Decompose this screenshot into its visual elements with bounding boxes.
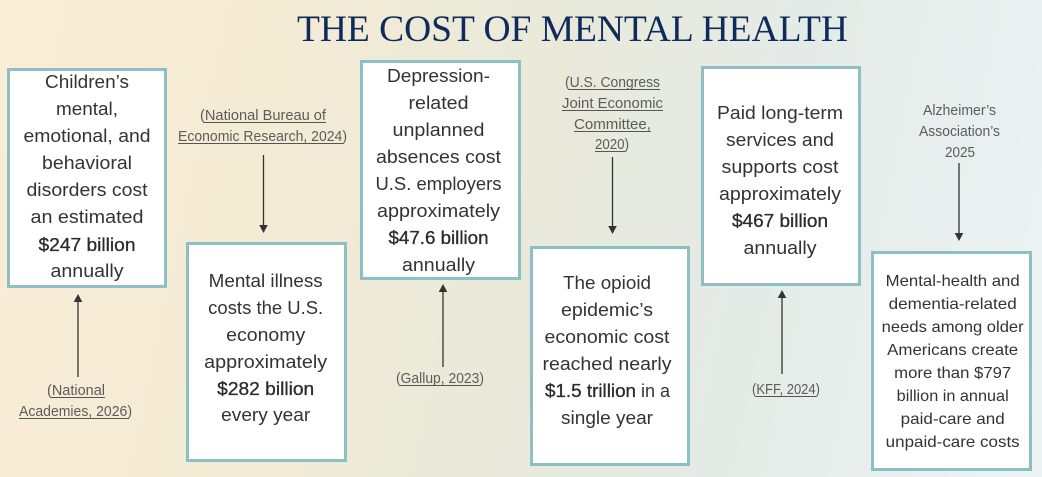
panel: opioid epidemic cost: epidemic’s	[561, 300, 653, 320]
citation: U.S. Congress Joint Economic Committee, 2020: (U.S. Congress	[565, 75, 660, 91]
panel: children's disorders cost: $247 billion	[38, 235, 136, 255]
panel: mental illness cost: Mental illness	[209, 271, 323, 291]
citation: National Academies, 2026: (National	[47, 383, 105, 399]
citation: Alzheimer's Association 2025: Association’s	[919, 124, 1000, 140]
citation: Gallup, 2023: (Gallup, 2023)	[396, 371, 484, 387]
citation: Alzheimer's Association 2025: Alzheimer’s	[923, 103, 996, 119]
panel: depression-related absences cost: related	[408, 93, 468, 113]
citation: U.S. Congress Joint Economic Committee, 2020: Joint Economic	[562, 96, 663, 112]
panel: older Americans care cost: dementia-related	[889, 296, 1017, 313]
panel: children's disorders cost: disorders cost	[26, 180, 148, 200]
panel: long-term services cost: annually	[744, 238, 816, 258]
citation: Alzheimer's Association 2025	[919, 103, 1000, 161]
citation: U.S. Congress Joint Economic Committee, 2020	[562, 75, 663, 153]
citation: National Academies, 2026	[19, 383, 132, 420]
citation: KFF, 2024: (KFF, 2024)	[752, 382, 820, 398]
citation: Alzheimer's Association 2025: 2025	[945, 145, 975, 161]
panel: children's disorders cost	[8, 70, 166, 286]
arrow: Alzheimer's Association down to older Americans panel	[955, 163, 963, 241]
arrow: KFF up to long-term services panel	[778, 290, 786, 374]
panel: depression-related absences cost: Depression-	[387, 66, 490, 86]
panel: depression-related absences cost	[362, 62, 520, 278]
panel: depression-related absences cost: $47.6 billion	[388, 228, 488, 248]
arrow: Gallup up to depression panel	[439, 284, 447, 367]
panel: opioid epidemic cost: in a	[641, 381, 671, 401]
panel: older Americans care cost: needs among older	[882, 319, 1024, 336]
panel: older Americans care cost: paid-care and	[901, 411, 1005, 428]
arrow: National Academies up to children's panel	[74, 294, 82, 377]
panel: depression-related absences cost: U.S. employers	[376, 174, 502, 194]
panel: long-term services cost: supports cost	[722, 157, 838, 177]
arrow: U.S. Congress down to opioid panel	[608, 157, 617, 234]
panel: children's disorders cost: an estimated	[30, 207, 144, 227]
panel: depression-related absences cost: absences cost	[376, 147, 501, 167]
panel: opioid epidemic cost: $1.5 trillion	[545, 381, 636, 401]
panel: mental illness cost: approximately	[204, 352, 327, 372]
panel: opioid epidemic cost: reached nearly	[542, 354, 672, 374]
panel: older Americans care cost: Americans create	[887, 342, 1018, 359]
panel: opioid epidemic cost: single year	[561, 408, 653, 428]
citation: National Academies, 2026: Academies, 2026)	[19, 404, 132, 420]
panel: long-term services cost: Paid long-term	[717, 103, 843, 123]
panel: opioid epidemic cost	[532, 248, 688, 464]
panel: mental illness cost: $282 billion	[217, 379, 314, 399]
panel: children's disorders cost: behavioral	[42, 153, 132, 173]
panel: children's disorders cost: mental,	[56, 99, 118, 119]
panel: long-term services cost: services and	[726, 130, 834, 150]
panel: long-term services cost: $467 billion	[732, 211, 828, 231]
citation: National Bureau of Economic Research, 2024	[178, 108, 347, 145]
panel: older Americans care cost: Mental-health and	[886, 273, 1020, 290]
citation: National Bureau of Economic Research, 2024: (National Bureau of	[200, 108, 327, 124]
panel: opioid epidemic cost: economic cost	[544, 327, 670, 347]
panel: older Americans care cost: more than $797	[894, 365, 1011, 382]
panel: opioid epidemic cost: The opioid	[563, 273, 651, 293]
panel: older Americans care cost	[872, 252, 1030, 470]
panel: long-term services cost: approximately	[719, 184, 841, 204]
panel: depression-related absences cost: unplanned	[392, 120, 484, 140]
panel: mental illness cost: economy	[226, 325, 305, 345]
arrow: National Bureau down to mental illness panel	[259, 155, 268, 233]
panel: older Americans care cost: billion in annual	[897, 388, 1009, 405]
panel: long-term services cost	[702, 68, 860, 284]
panel: children's disorders cost: annually	[50, 261, 124, 281]
panel: mental illness cost: every year	[221, 405, 310, 425]
panel: mental illness cost	[188, 244, 346, 460]
panel: children's disorders cost: Children’s	[45, 72, 129, 92]
panel: older Americans care cost: unpaid-care costs	[886, 434, 1020, 451]
citation: U.S. Congress Joint Economic Committee, 2020: Committee,	[574, 117, 651, 133]
title: THE COST OF MENTAL HEALTH	[297, 9, 848, 50]
citation: National Bureau of Economic Research, 2024: Economic Research, 2024)	[178, 129, 347, 145]
panel: depression-related absences cost: approximately	[377, 201, 500, 221]
citation: U.S. Congress Joint Economic Committee, 2020: 2020)	[595, 137, 629, 153]
panel: children's disorders cost: emotional, and	[24, 126, 150, 146]
panel: mental illness cost: costs the U.S.	[208, 298, 323, 318]
panel: depression-related absences cost: annually	[402, 255, 475, 275]
